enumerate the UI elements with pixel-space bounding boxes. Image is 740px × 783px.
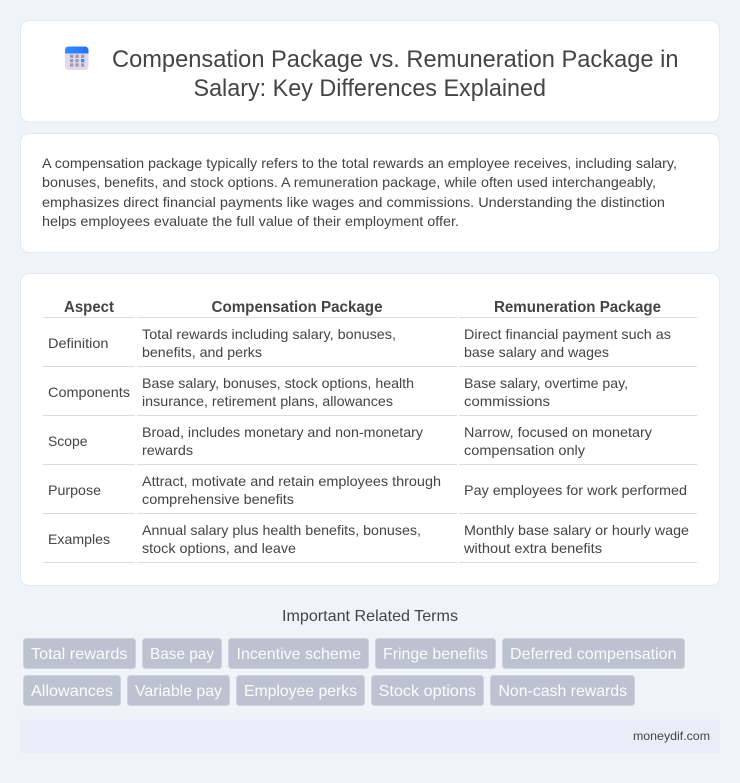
footer band	[20, 720, 720, 753]
tag: allowances: Allowances	[31, 683, 113, 700]
intro paragraph: A compensation package typically refers to the total rewards an employee receives, including salary,	[42, 155, 677, 171]
tag: variable pay	[128, 676, 230, 706]
title: Salary: Key Differences Explained	[194, 75, 546, 102]
table row: components: Components	[48, 384, 130, 400]
table row: examples: Monthly base salary or hourly wage	[464, 522, 689, 538]
table row: purpose: Pay employees for work performed	[464, 482, 687, 498]
table row: definition: Definition	[48, 335, 108, 351]
intro paragraph	[42, 155, 677, 229]
title	[112, 46, 678, 102]
intro paragraph: helps employees evaluate the full value of their employment offer.	[42, 213, 459, 229]
table row: purpose: comprehensive benefits	[142, 491, 294, 507]
tag: employee perks	[236, 676, 364, 706]
panel: title card	[20, 20, 720, 122]
table row: components: commissions	[464, 393, 550, 409]
tag: incentive scheme: Incentive scheme	[236, 646, 361, 663]
heading: important related terms: Important Related Terms	[282, 608, 458, 625]
tag: deferred compensation: Deferred compensation	[510, 646, 676, 663]
panel: intro text card	[20, 134, 720, 252]
tag: stock options	[372, 676, 484, 706]
footer source text: moneydif.com	[633, 729, 710, 743]
related terms tags	[24, 638, 684, 706]
table row: definition: Direct financial payment such as	[464, 326, 671, 342]
title: Compensation Package vs. Remuneration Package in	[112, 46, 678, 73]
table row: scope: compensation only	[464, 442, 585, 458]
table row: scope: Narrow, focused on monetary	[464, 424, 652, 440]
tag: base pay: Base pay	[150, 646, 214, 663]
table row: definition	[43, 326, 697, 367]
tag: total rewards: Total rewards	[31, 646, 128, 663]
table row: definition: base salary and wages	[464, 344, 609, 360]
table row: components: Base salary, bonuses, stock options, health	[142, 375, 414, 391]
table row: components: Base salary, overtime pay,	[464, 375, 628, 391]
tag: incentive scheme	[228, 638, 368, 668]
table row: components: insurance, retirement plans, allowances	[142, 393, 393, 409]
intro paragraph: emphasizes direct financial payments like wages and commissions. Understanding the distinction	[42, 194, 665, 210]
tag: fringe benefits: Fringe benefits	[383, 646, 488, 663]
tag: non-cash rewards	[490, 676, 634, 706]
table row: examples: Examples	[48, 531, 110, 547]
table row: scope: Scope	[48, 433, 88, 449]
table row: purpose	[43, 473, 697, 514]
tag: allowances	[24, 676, 120, 706]
tag: non-cash rewards: Non-cash rewards	[498, 683, 627, 700]
table row: examples: without extra benefits	[463, 540, 602, 556]
icon: calendar	[65, 46, 88, 70]
table row: purpose: Attract, motivate and retain employees through	[142, 473, 441, 489]
tag: fringe benefits	[376, 638, 496, 668]
tag: stock options: Stock options	[378, 683, 476, 700]
intro paragraph: bonuses, benefits, and stock options. A remuneration package, while often used interchangeably,	[42, 174, 656, 190]
table header row	[43, 299, 697, 318]
tag: base pay	[142, 638, 222, 668]
table row: examples: stock options, and leave	[142, 540, 296, 556]
tag: variable pay: Variable pay	[135, 683, 222, 700]
panel: comparison table card	[20, 274, 720, 586]
table row: examples: Annual salary plus health benefits, bonuses,	[142, 522, 421, 538]
table row: scope: Broad, includes monetary and non-monetary	[142, 424, 423, 440]
table header row: Compensation Package	[212, 299, 383, 316]
tag: employee perks: Employee perks	[244, 683, 357, 700]
tag: total rewards	[24, 638, 136, 668]
table row: components	[43, 375, 697, 416]
table header row: Remuneration Package	[494, 299, 661, 316]
table row: definition: benefits, and perks	[142, 344, 262, 360]
tag: deferred compensation	[502, 638, 684, 668]
table row: examples	[43, 522, 697, 563]
table row: scope: rewards	[142, 442, 193, 458]
table row: definition: Total rewards including salary, bonuses,	[142, 326, 396, 342]
table header row: Aspect	[64, 299, 114, 316]
table row: scope	[43, 424, 697, 465]
table row: purpose: Purpose	[48, 482, 101, 498]
